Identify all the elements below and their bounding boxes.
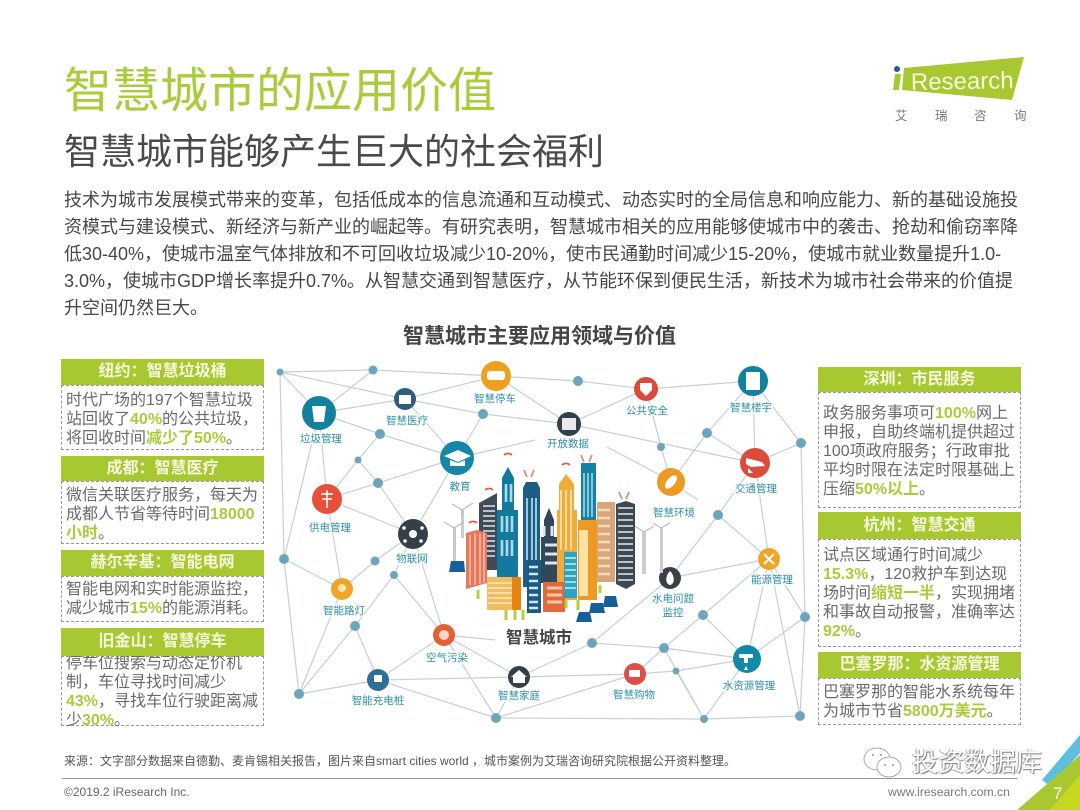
card header: 深圳：市民服务: [863, 371, 976, 388]
card text: 政务服务事项可100%网上: [823, 405, 1008, 422]
logo: iResearch: 瑞: [935, 109, 948, 123]
card header: 巴塞罗那：水资源管理: [839, 656, 1000, 673]
card text: [823, 404, 1015, 498]
card text: 巴塞罗那的智能水系统每年: [823, 684, 1015, 701]
panel: 深圳: [818, 367, 1021, 508]
logo: iResearch: 艾: [895, 109, 908, 123]
card body: [818, 392, 1021, 508]
watermark: WeChat icon: [864, 748, 902, 778]
card header: [61, 628, 264, 656]
website: www.iresearch.com.cn: [888, 785, 1010, 799]
icon: 教育: 教育: [450, 480, 470, 493]
panel: 纽约: [61, 359, 264, 450]
panel: 赫尔辛基: [61, 550, 264, 622]
card header: 纽约：智慧垃圾桶: [98, 363, 226, 380]
icon: 智慧家庭: [498, 666, 540, 702]
intro paragraph: [64, 190, 1018, 318]
card text: 成都人节省等待时间18000: [66, 506, 255, 523]
card text: 100项政府服务；行政审批: [823, 443, 1010, 460]
icon: 智慧医疗: [386, 388, 428, 427]
watermark text: 投资数据库: [912, 747, 1042, 777]
icon: 物联网: [396, 519, 428, 565]
card header: 成都：智慧医疗: [106, 460, 218, 477]
panel: 旧金山: [61, 628, 264, 729]
corner decoration and page number: 7: [1053, 784, 1062, 803]
intro paragraph: 3.0%，使城市GDP增长率提升0.7%。从智慧交通到智慧医疗，从节能环保到便民生活，新技术为城市社会带来的价值提: [64, 271, 1013, 291]
icon: 开放数据: 开放数据: [547, 437, 589, 450]
card body: [61, 656, 264, 726]
card text: 压缩50%以上。: [823, 481, 935, 498]
card text: [66, 391, 258, 447]
card text: 15.3%，120救护车到达现: [823, 566, 1007, 583]
network diagram: [276, 361, 810, 723]
icon: 水资源管理: 水资源管理: [723, 679, 776, 692]
panel: 巴塞罗那: [818, 652, 1021, 725]
card text: 时代广场的197个智慧垃圾: [66, 392, 253, 409]
card text: 92%。: [823, 623, 871, 640]
card text: 43%，寻找车位行驶距离减: [66, 693, 258, 710]
card text: 制，车位寻找时间减少: [66, 674, 226, 691]
card text: 减少城市15%的能源消耗。: [66, 600, 258, 617]
icon: 教育: [440, 441, 474, 493]
logo: iResearch: 询: [1014, 109, 1027, 123]
card text: [823, 546, 1015, 640]
source note: 来源：文字部分数据来自德勤、麦肯锡相关报告，图片来自smart cities world ，城市案例为艾瑞咨询研究院根据公开资料整理。: [64, 754, 736, 768]
card header: 旧金山：智慧停车: [98, 633, 226, 650]
icon: 公共安全: [626, 377, 668, 417]
icon: 开放数据: [547, 412, 589, 450]
card text: [823, 683, 1015, 720]
icon: 智慧医疗: 智慧医疗: [386, 414, 428, 427]
card text: [66, 486, 258, 542]
card header: 赫尔辛基：智能电网: [90, 554, 234, 571]
icon: 物联网: 物联网: [396, 552, 428, 565]
card body: [818, 678, 1021, 725]
icon: 智慧家庭: 智慧家庭: [498, 689, 540, 702]
icon: 智慧停车: [474, 361, 516, 405]
icon: 空气污染: 空气污染: [426, 651, 468, 664]
intro paragraph: 资模式与建设模式、新经济与新产业的崛起等。有研究表明，智慧城市相关的应用能够使城市中的袭击、抢劫和偷窃率降: [64, 217, 1018, 237]
icon: 垃圾管理: 垃圾管理: [300, 432, 342, 445]
icon: 垃圾管理: [300, 396, 342, 445]
icon: 智慧购物: 智慧购物: [613, 688, 655, 701]
card text: 小时。: [66, 525, 114, 542]
card body: [61, 576, 264, 622]
card text: 申报，自助终端机提供超过: [823, 424, 1015, 441]
card body: [61, 385, 264, 450]
card text: [66, 580, 258, 617]
illustration: city skyline: [444, 453, 670, 622]
icon: 交通管理: 交通管理: [735, 482, 777, 495]
logo: iResearch: [893, 57, 1027, 123]
icon: 空气污染: [426, 624, 468, 664]
icon: 能源管理: 能源管理: [751, 573, 793, 586]
card text: 和事故自动报警，准确率达: [823, 604, 1015, 621]
card text: 场时间缩短一半，实现拥堵: [823, 585, 1015, 602]
card header: [818, 652, 1021, 678]
card header: [61, 550, 264, 576]
icon: 智能充电桩: 智能充电桩: [352, 694, 405, 707]
card text: 少30%。: [66, 712, 130, 729]
intro paragraph: 低30-40%，使城市温室气体排放和不可回收垃圾减少10-20%，使市民通勤时间减少15-20%，使城市就业数量提升1.0-: [64, 244, 1001, 264]
card header: [818, 512, 1021, 539]
logo: iResearch: 咨: [974, 108, 987, 123]
card header: 杭州：智慧交通: [863, 517, 976, 534]
icon: 智慧环境: 智慧环境: [653, 506, 695, 519]
icon: 智慧购物: [613, 663, 655, 701]
label: 智慧城市: 智慧城市: [506, 627, 572, 647]
card text: 为城市节省5800万美元。: [823, 703, 1003, 720]
intro paragraph: 技术为城市发展模式带来的变革，包括低成本的信息流通和互动模式、动态实时的全局信息和响应能力、新的基础设施投: [64, 190, 1018, 210]
icon: 智慧楼宇: [730, 366, 772, 414]
icon: 智能路灯: [323, 578, 365, 617]
card text: 智能电网和实时能源监控，: [66, 581, 258, 598]
icon: 水电问题监控: 监控: [662, 606, 684, 619]
subtitle: 智慧城市能够产生巨大的社会福利: [64, 131, 604, 172]
card text: 站回收了40%的公共垃圾，: [66, 411, 258, 428]
icon: 能源管理: [751, 548, 793, 586]
icon: 公共安全: 公共安全: [626, 404, 668, 417]
card text: 微信关联医疗服务，每天为: [66, 487, 258, 504]
card text: 试点区域通行时间减少: [823, 547, 983, 564]
corner decoration and page number: [1017, 735, 1080, 810]
copyright: ©2019.2 iResearch Inc.: [64, 785, 190, 799]
panel: 成都: [61, 456, 264, 544]
chart heading: 智慧城市主要应用领域与价值: [403, 325, 676, 348]
icon: 智慧环境: [653, 468, 695, 519]
card header: [61, 359, 264, 385]
icon: 供电管理: [309, 484, 351, 534]
panel: 杭州: [818, 512, 1021, 647]
icon: 水资源管理: [723, 645, 776, 692]
icon: 智慧停车: 智慧停车: [474, 392, 516, 405]
icon: 智能充电桩: [352, 669, 405, 707]
icon: 供电管理: 供电管理: [309, 521, 351, 534]
icon: 水电问题监控: 水电问题: [652, 592, 694, 605]
icon: 交通管理: [735, 448, 777, 495]
card header: [818, 367, 1021, 392]
icon: 水电问题监控: [652, 567, 694, 619]
card body: [818, 539, 1021, 647]
card header: [61, 456, 264, 481]
card text: 将回收时间减少了50%。: [66, 430, 242, 447]
card text: 停车位搜索与动态定价机: [66, 655, 242, 672]
icon: 智慧楼宇: 智慧楼宇: [730, 401, 772, 414]
card text: [66, 655, 258, 729]
card body: [61, 481, 264, 544]
title: 智慧城市的应用价值: [64, 65, 496, 118]
card text: 平均时限在法定时限基础上: [823, 462, 1015, 479]
icon: 智能路灯: 智能路灯: [323, 604, 365, 617]
intro paragraph: 升空间仍然巨大。: [64, 298, 208, 318]
logo: iResearch: Research: [911, 67, 1014, 96]
